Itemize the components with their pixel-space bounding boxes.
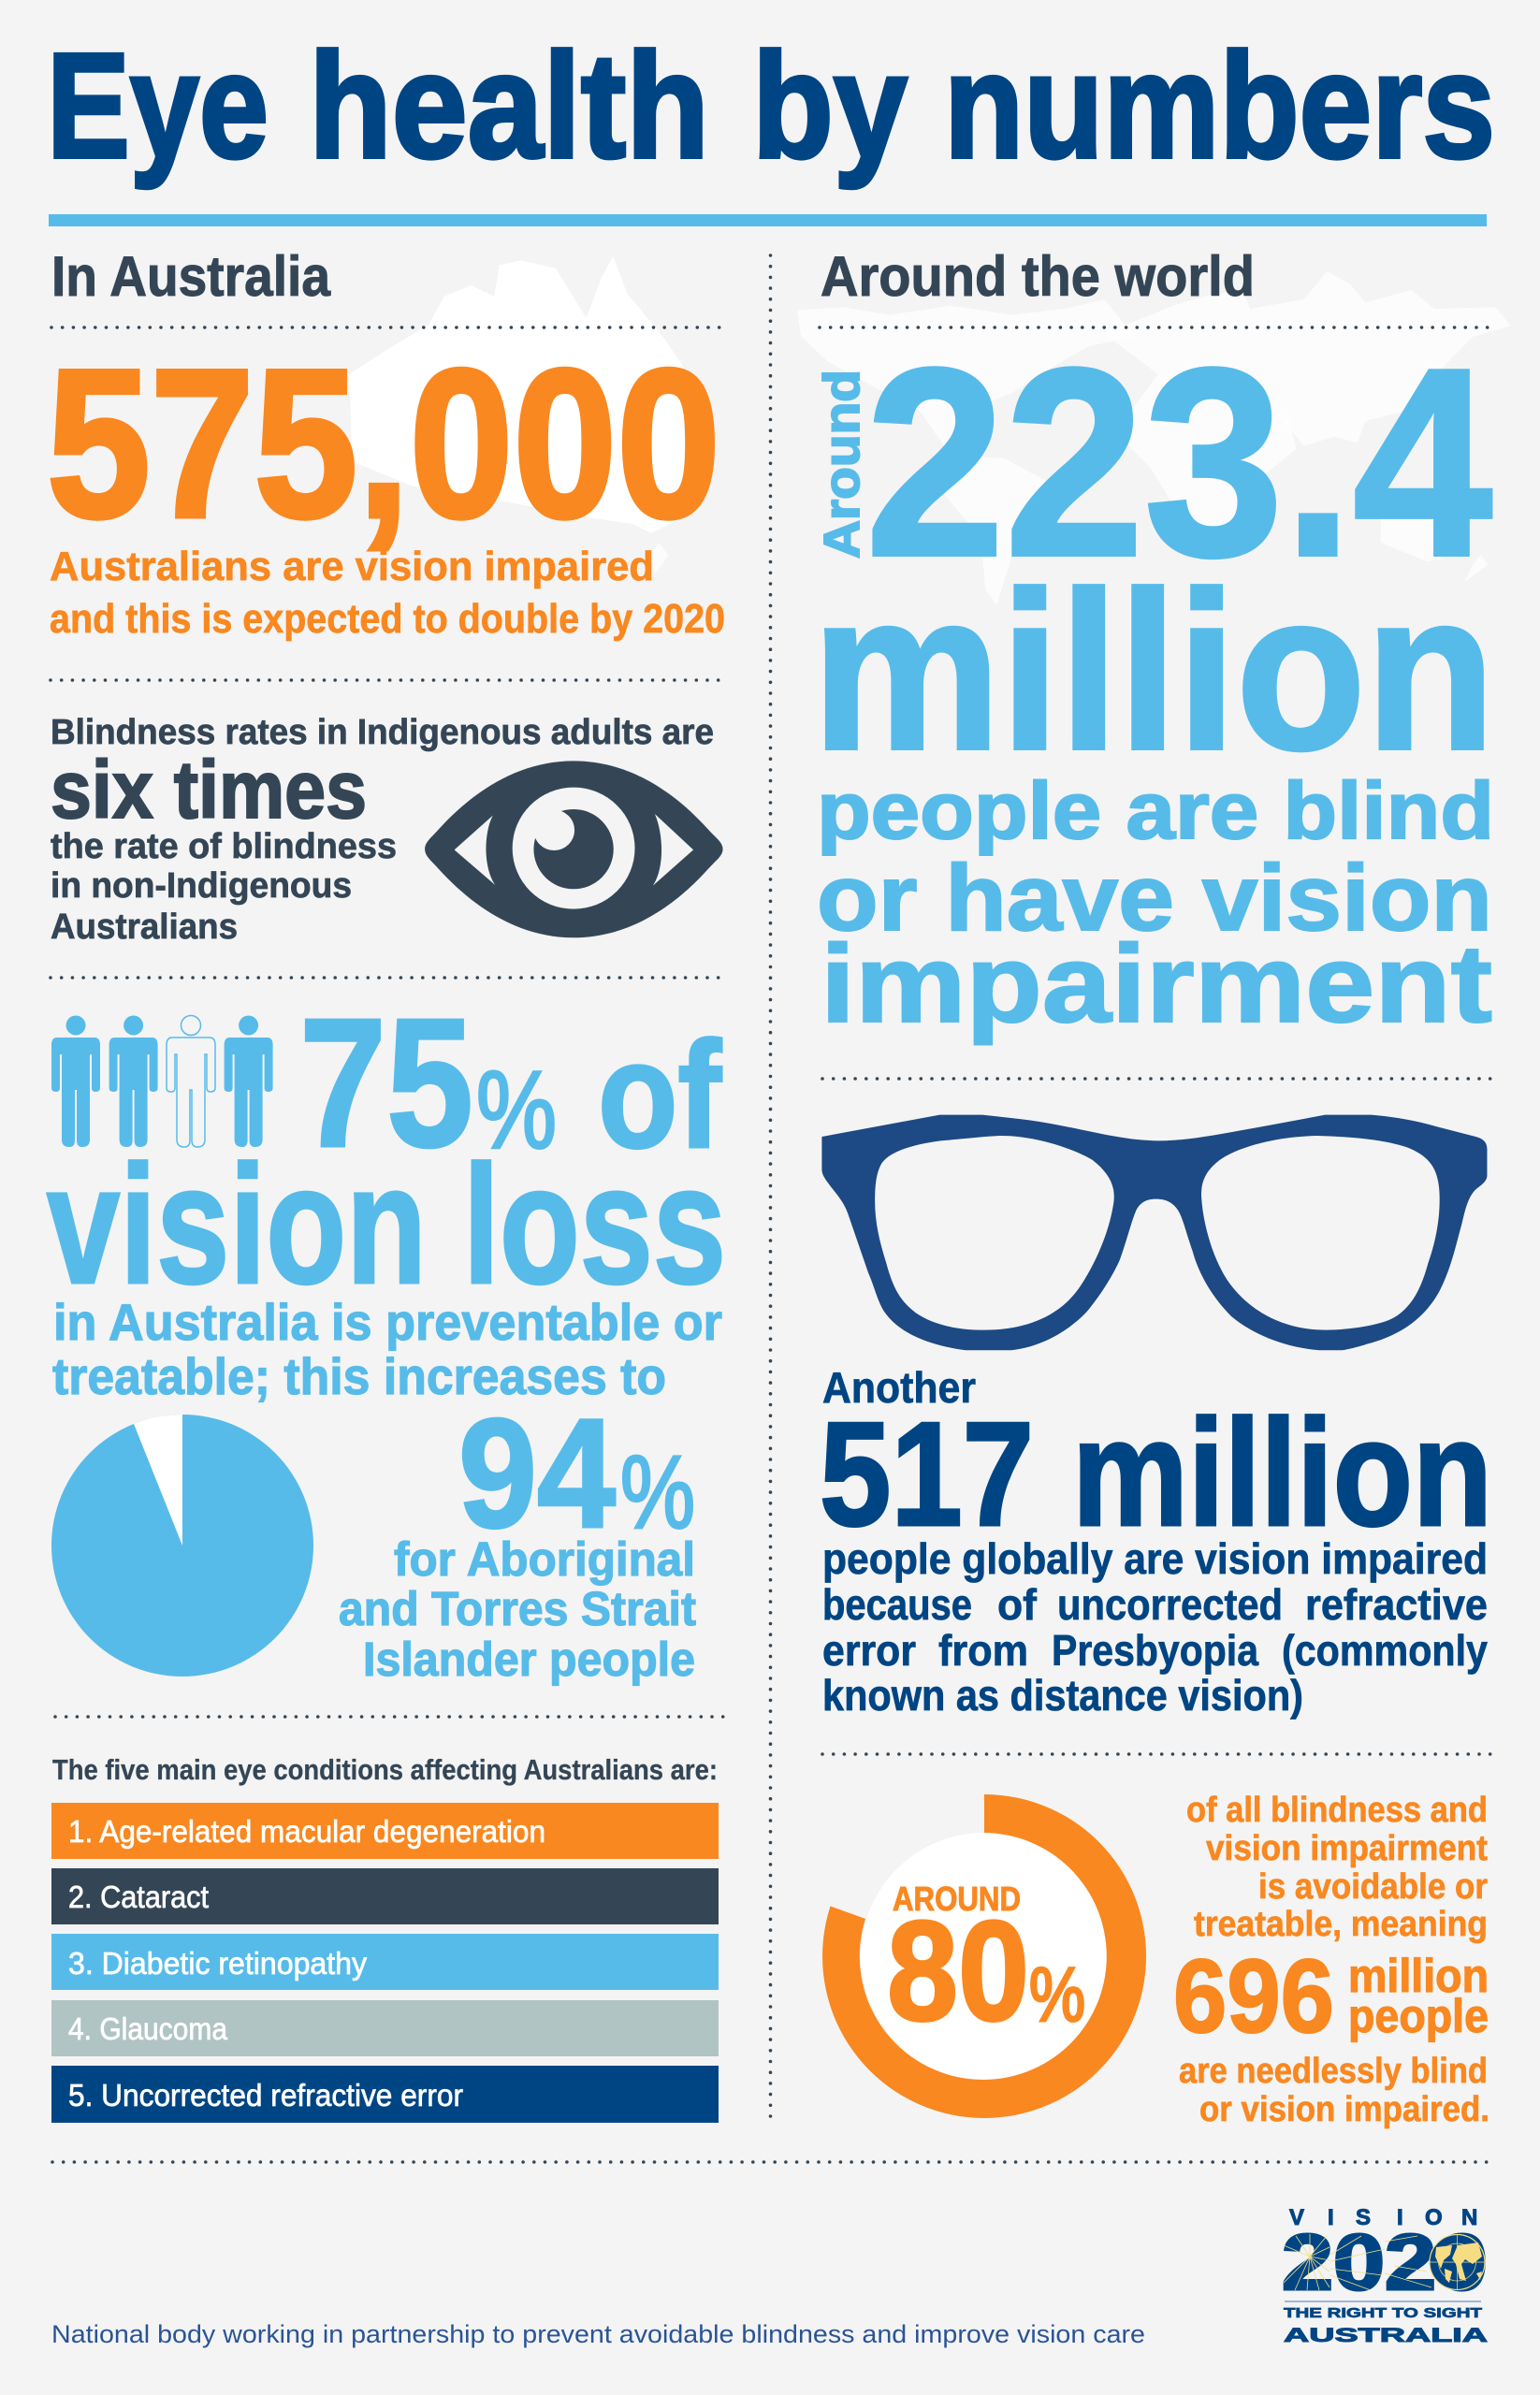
title: health: [309, 22, 709, 189]
bar: refractive error: [51, 2066, 719, 2123]
panel: In Australia: [47, 245, 726, 2123]
stat: 517 million: because: [822, 1580, 972, 1629]
stat: Around 223.4 million: [812, 312, 1495, 1046]
stat: 517 million: known as distance vision): [822, 1671, 1303, 1720]
bar: diabetic retinopathy: [51, 1934, 719, 1990]
bar: glaucoma: 4. Glaucoma: [68, 2011, 228, 2046]
logo: Vision 2020 Australia: [1282, 2205, 1488, 2346]
text block: 696 million people: are needlessly blind: [1179, 2052, 1488, 2091]
logo: Vision 2020 Australia: VISION: [1289, 2205, 1477, 2230]
stat: 75% of vision loss: treatable; this increases to: [52, 1347, 666, 1405]
icon: four people: [51, 1016, 273, 1147]
stat: 517 million: 517: [820, 1392, 1034, 1557]
text block: 696 million people: [1173, 1791, 1489, 2129]
stat: 75% of vision loss: in Australia is preventable or: [53, 1293, 722, 1351]
list heading: The five main eye conditions affecting Australians are:: [52, 1753, 718, 1786]
stat: 517 million: (commonly: [1282, 1626, 1488, 1675]
stat: 75% of vision loss: %: [476, 1049, 557, 1172]
text block: 696 million people: people: [1348, 1990, 1489, 2042]
bar: cataract: [51, 1868, 719, 1924]
logo: Vision 2020 Australia: AUSTRALIA: [1284, 2325, 1488, 2346]
text block: six times: Blindness rates in Indigenous adults are: [51, 713, 714, 752]
stat: 75% of vision loss: [47, 980, 726, 1405]
text block: 696 million people: million: [1348, 1950, 1489, 2002]
bar: diabetic retinopathy: 3. Diabetic retinopathy: [68, 1946, 367, 1981]
stat: 517 million: [820, 1363, 1492, 1720]
stat: 94%: for Aboriginal: [394, 1532, 695, 1586]
title: Eye: [47, 22, 269, 189]
stat: 517 million: from: [938, 1626, 1028, 1675]
stat: 517 million: Presbyopia: [1052, 1626, 1258, 1675]
stat: 94%: Islander people: [363, 1633, 695, 1686]
text block: six times: six times: [51, 745, 367, 835]
donut chart: around 80%: AROUND: [893, 1880, 1021, 1918]
stat: 94%: [339, 1387, 696, 1686]
panel: Around the world: [812, 245, 1495, 2129]
stat: Around 223.4 million: Around: [814, 370, 870, 559]
text block: six times: the rate of blindness: [51, 827, 397, 866]
stat: 517 million: of: [997, 1580, 1038, 1629]
icon: glasses: [821, 1115, 1487, 1350]
text block: 696 million people: vision impairment: [1206, 1829, 1488, 1868]
heading: In Australia: In Australia: [51, 245, 331, 308]
stat: 517 million: Another: [822, 1363, 976, 1412]
text block: 696 million people: treatable, meaning: [1194, 1905, 1488, 1944]
heading: Around the world: Around the world: [821, 245, 1255, 308]
text block: 696 million people: or vision impaired.: [1199, 2090, 1489, 2129]
title rule: [49, 214, 1487, 226]
bar: macular degeneration: [51, 1803, 719, 1859]
icon: eye: [425, 761, 723, 937]
stat caption line 2: and this is expected to double by 2020: [50, 596, 725, 642]
background world map: [349, 255, 1511, 605]
donut chart: around 80%: [822, 1794, 1146, 2118]
donut chart: around 80%: %: [1029, 1952, 1085, 2038]
stat: 517 million: error: [822, 1626, 916, 1675]
bar: macular degeneration: 1. Age-related macular degeneration: [68, 1814, 545, 1849]
donut chart: around 80%: 80: [887, 1892, 1029, 2051]
stat: 575,000: 575,000: [47, 325, 720, 561]
logo: Vision 2020 Australia: 2020: [1282, 2218, 1488, 2306]
stat: 94%: %: [620, 1435, 695, 1550]
stat: 517 million: refractive: [1305, 1580, 1488, 1629]
stat: 94%: and Torres Strait: [339, 1582, 696, 1635]
logo: Vision 2020 Australia: THE RIGHT TO SIGHT: [1284, 2306, 1482, 2321]
text block: 696 million people: of all blindness and: [1186, 1791, 1488, 1830]
stat: Around 223.4 million: or have vision: [817, 846, 1492, 951]
bar: cataract: 2. Cataract: [68, 1880, 209, 1914]
pie chart: 94%: [51, 1415, 313, 1676]
stat: 75% of vision loss: 75: [299, 980, 473, 1185]
stat: 94%: 94: [458, 1387, 616, 1560]
stat: Around 223.4 million: impairment: [821, 922, 1492, 1046]
stat: 517 million: people globally are vision impaired: [822, 1534, 1488, 1583]
stat: 517 million: uncorrected: [1057, 1580, 1283, 1629]
stat: 75% of vision loss: of: [598, 1010, 722, 1180]
eye conditions list: [51, 1753, 719, 2123]
text block: six times: [51, 713, 714, 947]
stat: Around 223.4 million: 223.4: [865, 312, 1494, 612]
stat: Around 223.4 million: people are blind: [817, 766, 1494, 856]
text block: six times: in non-Indigenous: [51, 866, 352, 906]
title: by: [752, 22, 908, 189]
stat: 75% of vision loss: vision loss: [47, 1131, 726, 1319]
footer tagline: National body working in partnership to prevent avoidable blindness and improve vision care: [51, 2320, 1145, 2348]
text block: 696 million people: 696: [1173, 1938, 1334, 2054]
bar: refractive error: 5. Uncorrected refractive error: [68, 2078, 463, 2112]
bar: glaucoma: [51, 2000, 719, 2056]
title: [47, 22, 1495, 189]
stat caption: Australians are vision impaired: [50, 544, 654, 589]
stat: Around 223.4 million: million: [812, 545, 1495, 796]
text block: 696 million people: is avoidable or: [1258, 1867, 1488, 1907]
text block: six times: Australians: [51, 907, 238, 947]
